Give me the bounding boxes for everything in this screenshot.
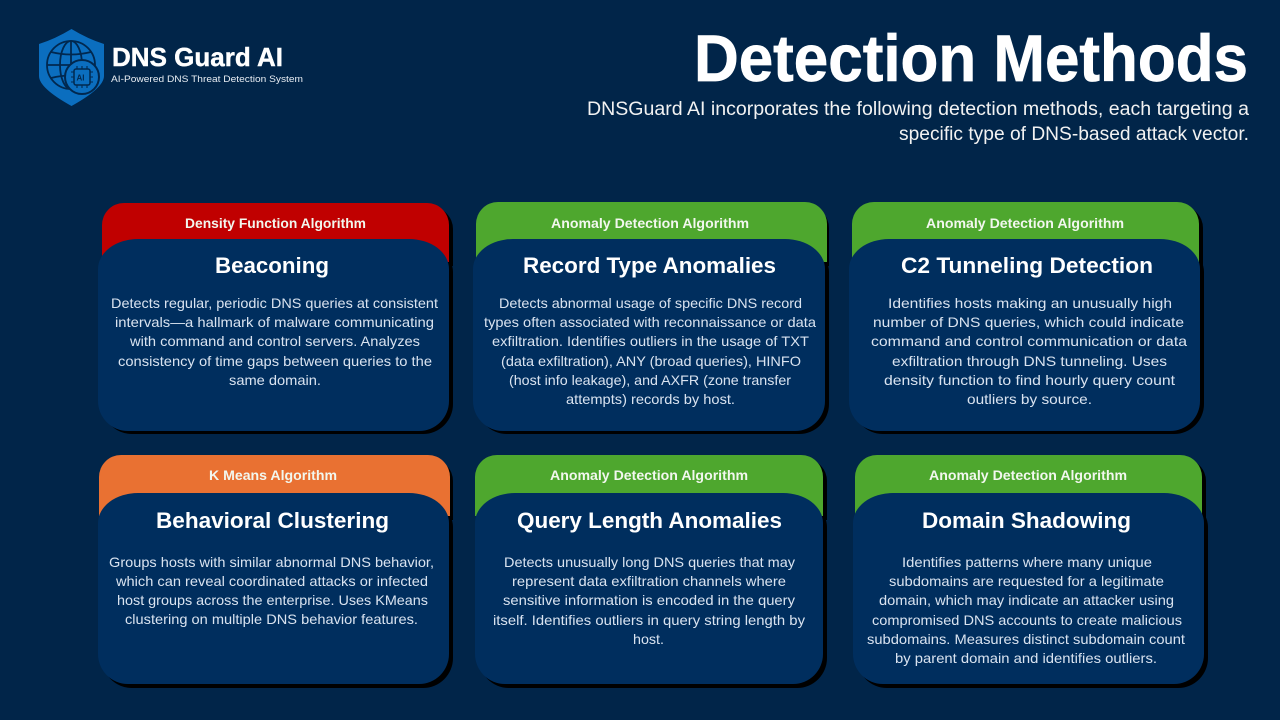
tag: Density Function Algorithm: [102, 203, 449, 262]
panel: Beaconing: [98, 203, 453, 434]
logo wordmark: DNS Guard AI: [112, 42, 283, 72]
description: exfiltration. Identifies outliers in the usage of TXT: [492, 333, 809, 349]
tag: Anomaly Detection Algorithm: [476, 202, 827, 262]
description: (host info leakage), and AXFR (zone transfer: [509, 372, 791, 388]
logo tagline: AI-Powered DNS Threat Detection System: [111, 74, 303, 85]
panel: Record Type Anomalies: [473, 202, 829, 434]
card body: [853, 493, 1204, 684]
heading: Beaconing: [215, 253, 329, 278]
description: Identifies patterns where many unique: [902, 554, 1152, 570]
description: Detects abnormal usage of specific DNS record: [499, 295, 802, 311]
description: Detects unusually long DNS queries that may: [504, 554, 795, 570]
description: [493, 554, 805, 647]
description: [867, 554, 1185, 666]
description: which can reveal coordinated attacks or infected: [115, 573, 428, 589]
description: [109, 554, 434, 627]
description: (data exfiltration), ANY (broad queries), HINFO: [501, 353, 801, 369]
description: by parent domain and identifies outliers.: [895, 650, 1157, 666]
card body: [98, 493, 449, 684]
description: command and control communication or data: [871, 333, 1187, 349]
description: host groups across the enterprise. Uses KMeans: [117, 592, 428, 608]
heading: Query Length Anomalies: [517, 508, 782, 533]
description: types often associated with reconnaissance or data: [484, 314, 816, 330]
subtitle: DNSGuard AI incorporates the following detection methods, each targeting a: [587, 99, 1249, 120]
subtitle: [587, 99, 1249, 145]
icon: shield with globe and AI chip: [39, 29, 104, 106]
description: number of DNS queries, which could indicate: [873, 314, 1184, 330]
description: Groups hosts with similar abnormal DNS behavior,: [109, 554, 434, 570]
description: [484, 295, 816, 407]
card body: [98, 239, 449, 431]
tag: Density Function Algorithm: Density Function Algorithm: [185, 216, 366, 231]
description: Identifies hosts making an unusually high: [888, 295, 1172, 311]
heading: Domain Shadowing: [922, 508, 1131, 533]
description: sensitive information is encoded in the query: [503, 592, 795, 608]
tag: K Means Algorithm: [99, 455, 450, 516]
description: [111, 295, 438, 388]
description: same domain.: [229, 372, 321, 388]
card body: [473, 239, 825, 431]
card body: [475, 493, 823, 684]
description: consistency of time gaps between queries to the: [118, 353, 432, 369]
description: [871, 295, 1187, 407]
description: intervals—a hallmark of malware communicating: [115, 314, 434, 330]
description: host.: [633, 631, 664, 647]
description: attempts) records by host.: [566, 391, 735, 407]
description: with command and control servers. Analyzes: [129, 333, 420, 349]
description: subdomains. Measures distinct subdomain count: [867, 631, 1185, 647]
description: exfiltration through DNS tunneling. Uses: [892, 353, 1167, 369]
heading: C2 Tunneling Detection: [901, 253, 1153, 278]
heading: Behavioral Clustering: [156, 508, 389, 533]
panel: Query Length Anomalies: [475, 455, 827, 688]
card body: [849, 239, 1200, 431]
icon: shield with globe and AI chip: AI: [76, 74, 84, 82]
description: outliers by source.: [967, 391, 1092, 407]
description: subdomains are requested for a legitimate: [889, 573, 1164, 589]
tag: Anomaly Detection Algorithm: [475, 455, 823, 516]
tag: K Means Algorithm: K Means Algorithm: [209, 468, 337, 483]
tag: Anomaly Detection Algorithm: Anomaly Detection Algorithm: [926, 216, 1124, 231]
panel: Behavioral Clustering: [98, 455, 453, 688]
tag: Anomaly Detection Algorithm: Anomaly Detection Algorithm: [929, 468, 1127, 483]
tag: Anomaly Detection Algorithm: [852, 202, 1199, 262]
description: domain, which may indicate an attacker using: [879, 592, 1174, 608]
description: clustering on multiple DNS behavior features.: [125, 611, 418, 627]
description: density function to find hourly query count: [884, 372, 1175, 388]
title: Detection Methods: [694, 21, 1248, 95]
tag: Anomaly Detection Algorithm: Anomaly Detection Algorithm: [551, 216, 749, 231]
description: Detects regular, periodic DNS queries at consistent: [111, 295, 438, 311]
description: itself. Identifies outliers in query string length by: [493, 612, 805, 628]
subtitle: specific type of DNS-based attack vector.: [899, 124, 1249, 145]
description: represent data exfiltration channels where: [512, 573, 786, 589]
description: compromised DNS accounts to create malicious: [872, 612, 1182, 628]
tag: Anomaly Detection Algorithm: Anomaly Detection Algorithm: [550, 468, 748, 483]
logo: [39, 29, 303, 106]
heading: Record Type Anomalies: [523, 253, 776, 278]
panel: C2 Tunneling Detection: [849, 202, 1204, 434]
tag: Anomaly Detection Algorithm: [855, 455, 1202, 516]
panel: Domain Shadowing: [853, 455, 1208, 688]
